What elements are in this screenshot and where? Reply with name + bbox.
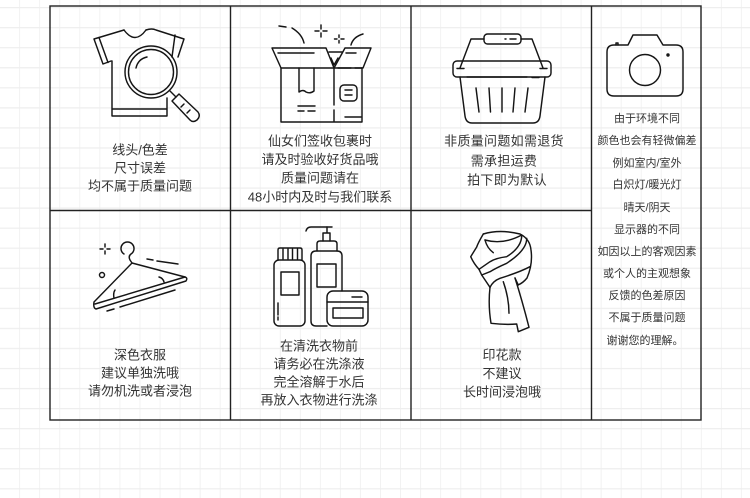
text: colour difference explanation: 白炽灯/暖光灯 bbox=[612, 177, 682, 191]
caption: return shipping: 拍下即为默认 bbox=[467, 172, 547, 188]
caption: return shipping: 需承担运费 bbox=[471, 154, 537, 168]
caption: detergent instructions: 完全溶解于水后 bbox=[273, 374, 365, 390]
text: colour difference explanation: 由于环境不同 bbox=[614, 111, 680, 125]
caption: parcel check bbox=[248, 134, 392, 204]
text: colour difference explanation: 反馈的色差原因 bbox=[608, 288, 686, 302]
caption: return shipping bbox=[444, 134, 564, 188]
caption: parcel check: 仙女们签收包裹时 bbox=[268, 134, 372, 148]
text: colour difference explanation: 显示器的不同 bbox=[614, 222, 680, 236]
caption: parcel check: 请及时验收好货品哦 bbox=[261, 152, 379, 167]
caption: dark clothes: 建议单独洗哦 bbox=[101, 366, 179, 380]
caption: detergent instructions bbox=[260, 338, 378, 408]
caption: printed items bbox=[463, 348, 541, 400]
text: colour difference explanation: 如因以上的客观因素 bbox=[598, 244, 696, 258]
text: colour difference explanation: 颜色也会有轻微偏差 bbox=[598, 133, 696, 147]
caption: detergent instructions: 请务必在洗涤液 bbox=[273, 356, 365, 372]
icon: t-shirt with magnifying glass bbox=[94, 29, 199, 122]
icon: clothes hanger bbox=[94, 242, 187, 311]
icon: camera bbox=[607, 35, 683, 96]
table frame bbox=[50, 6, 701, 420]
text: colour difference explanation: 例如室内/室外 bbox=[612, 156, 682, 170]
panel: thread and size differences bbox=[88, 29, 199, 194]
caption: thread and size: 线头/色差 bbox=[112, 142, 168, 158]
caption: printed items: 长时间浸泡哦 bbox=[463, 384, 541, 400]
icon: scarf bbox=[471, 232, 532, 332]
text: colour difference explanation bbox=[598, 111, 696, 347]
caption: dark clothes bbox=[88, 348, 192, 398]
caption: detergent instructions: 在清洗衣物前 bbox=[280, 338, 358, 354]
caption: printed items: 印花款 bbox=[482, 348, 522, 362]
text: colour difference explanation: 不属于质量问题 bbox=[608, 311, 686, 324]
text: colour difference explanation: 谢谢您的理解。 bbox=[606, 333, 684, 347]
panel: return shipping bbox=[444, 34, 564, 188]
caption: thread and size bbox=[88, 142, 192, 194]
caption: thread and size: 尺寸误差 bbox=[114, 160, 166, 176]
text: colour difference explanation: 或个人的主观想象 bbox=[603, 266, 691, 280]
panel: dissolve detergent first bbox=[260, 227, 378, 408]
text: colour difference explanation: 晴天/阴天 bbox=[623, 201, 671, 214]
panel: check parcel on receipt bbox=[248, 25, 392, 204]
caption: detergent instructions: 再放入衣物进行洗涤 bbox=[260, 392, 378, 408]
panel: colour difference notice bbox=[598, 35, 696, 347]
icon: open cardboard box bbox=[272, 25, 371, 122]
icon: shopping basket bbox=[453, 34, 551, 123]
panel: dark clothes washing bbox=[88, 242, 192, 398]
caption: printed items: 不建议 bbox=[482, 366, 522, 381]
caption: thread and size: 均不属于质量问题 bbox=[88, 178, 192, 194]
caption: parcel check: 质量问题请在 bbox=[281, 170, 359, 186]
caption: return shipping: 非质量问题如需退货 bbox=[444, 134, 564, 148]
caption: dark clothes: 请勿机洗或者浸泡 bbox=[88, 384, 192, 398]
caption: dark clothes: 深色衣服 bbox=[114, 348, 166, 362]
icon: detergent bottles bbox=[274, 227, 368, 326]
panel: printed items bbox=[463, 232, 541, 400]
caption: parcel check: 48小时内及时与我们联系 bbox=[248, 190, 392, 204]
